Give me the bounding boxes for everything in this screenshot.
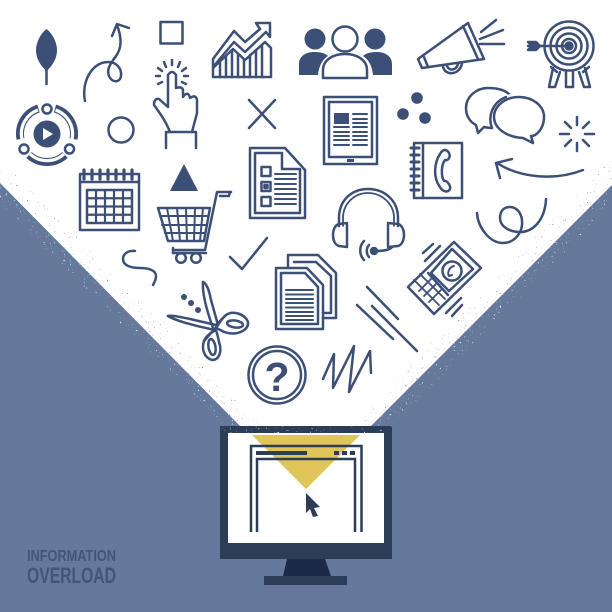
icon: check mark [230, 238, 267, 269]
icon: solid triangle [170, 164, 198, 191]
icon: bottom right scribble [477, 199, 546, 243]
icon: scissors [168, 282, 248, 360]
icon: headset [333, 189, 404, 260]
icon: shopping cart [158, 192, 231, 263]
icon: smartphone [408, 242, 481, 316]
icon: burst [560, 117, 594, 151]
title: information overload: INFORMATION [27, 548, 116, 565]
icon: diagonal lines [357, 287, 417, 351]
icon: megaphone [418, 20, 504, 73]
icon: curved arrow left [496, 159, 583, 178]
icon: leaf [36, 29, 57, 84]
icon: tablet [324, 97, 377, 164]
background blue panels [0, 160, 612, 612]
monitor [220, 426, 392, 585]
icon: rising chart [213, 23, 271, 77]
icon: zigzag [323, 346, 371, 392]
icon: people group [299, 26, 392, 78]
icon: play button ring [20, 104, 74, 162]
icon: target with arrow [528, 22, 594, 87]
title: information overload [27, 548, 116, 588]
icon: question mark: ? [264, 354, 290, 400]
icon: curly arrow up [84, 24, 129, 101]
icon: question mark [248, 346, 306, 404]
icon: three dots [397, 92, 431, 124]
icon: phone book [411, 143, 462, 198]
speckle on blue edges [0, 186, 611, 433]
icon: speech bubbles [466, 88, 549, 143]
icon: checklist document [250, 148, 305, 218]
icon: square [160, 22, 182, 44]
icon: calendar [80, 170, 139, 230]
icon: squiggle [123, 251, 156, 285]
icon: tapping hand [154, 60, 197, 148]
icon: documents stack [276, 255, 336, 329]
title: information overload: OVERLOAD [27, 563, 116, 588]
icon: cross mark [249, 100, 275, 128]
icon: circle [108, 118, 134, 142]
